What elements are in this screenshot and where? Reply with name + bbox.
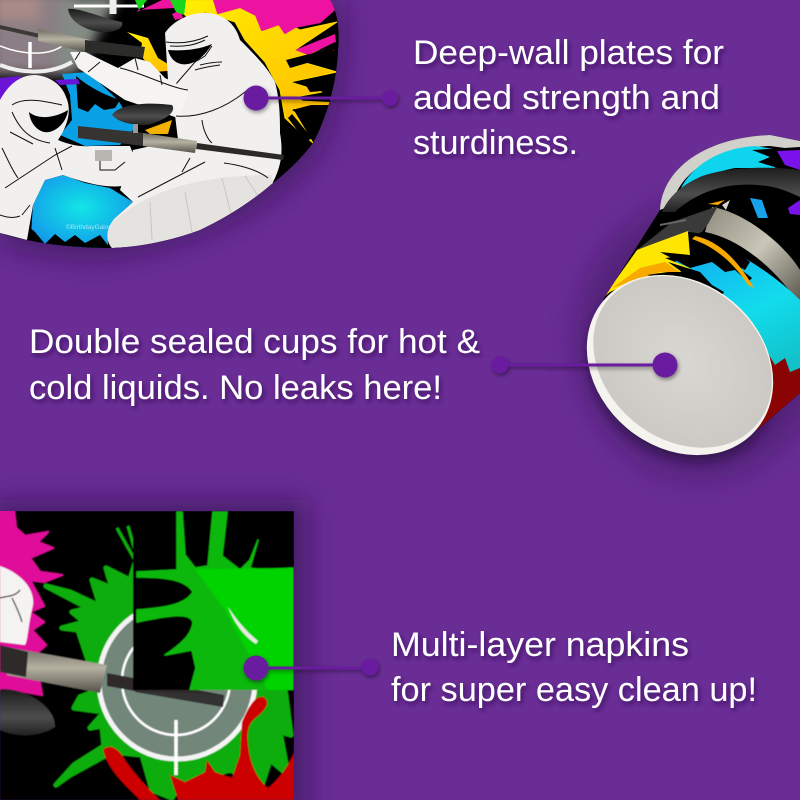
- target backdrop: [0, 0, 144, 75]
- barrel over fold: [135, 691, 224, 707]
- black splash: [660, 232, 752, 282]
- pink splat: [0, 511, 62, 695]
- small figure: [0, 75, 134, 240]
- red splash: [756, 354, 800, 430]
- text: napkin caption: for super easy clean up!: [391, 671, 757, 709]
- target: [99, 603, 255, 759]
- text: plate caption: Deep-wall plates for: [413, 34, 724, 72]
- figure hand: [0, 566, 33, 645]
- callout: plate pointer: [244, 86, 398, 110]
- gun band: [705, 207, 800, 305]
- panel: napkin: [0, 500, 308, 800]
- gun: [107, 673, 224, 707]
- rim: [660, 135, 800, 210]
- text: plate caption: sturdiness.: [413, 124, 578, 162]
- text: plate caption: [413, 34, 724, 162]
- hopper: [662, 168, 800, 212]
- cup base: [550, 238, 800, 492]
- panel: plate: [0, 0, 346, 260]
- copyright mark: ©BirthdayGalore: [66, 223, 115, 231]
- cup wall: [603, 135, 800, 430]
- napkin top fold: [133, 511, 294, 690]
- paint splat: blue: [0, 72, 135, 250]
- text: napkin caption: Multi-layer napkins: [391, 626, 689, 664]
- blue wall: [675, 258, 800, 372]
- red splat: [170, 697, 294, 800]
- paint splat: pink and yellow: [127, 0, 337, 143]
- text: napkin caption: [391, 626, 757, 709]
- yellow splash: [606, 231, 690, 296]
- arm: [70, 52, 177, 118]
- callout: cup pointer: [492, 352, 678, 378]
- panel: cup: [568, 135, 800, 487]
- green splat lower: [46, 560, 291, 798]
- paintball guns: [0, 9, 284, 160]
- cyan upper wall: [680, 146, 780, 190]
- big figure: [70, 13, 282, 248]
- text: plate caption: added strength and: [413, 79, 720, 117]
- text: cup caption: cold liquids. No leaks here!: [29, 369, 442, 407]
- text: cup caption: [29, 323, 480, 407]
- callout: napkin pointer: [244, 656, 378, 680]
- text: cup caption: Double sealed cups for hot &: [29, 323, 480, 361]
